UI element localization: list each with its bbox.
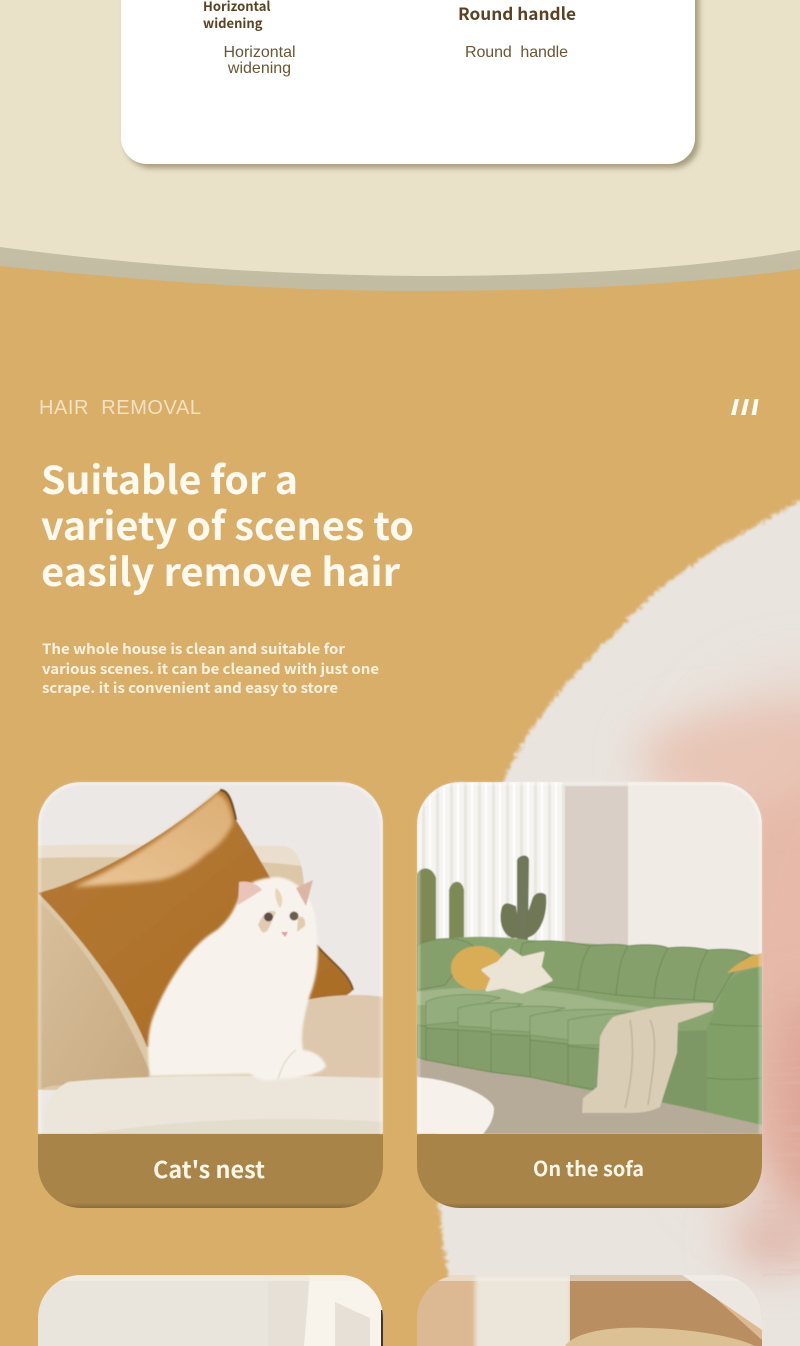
- heading: variety of scenes to: [41, 496, 414, 552]
- photo: cat on armchair: [38, 782, 383, 1134]
- section tag: hair removal: HAIR REMOVAL: [39, 397, 201, 419]
- panel: partial scene left: [38, 1275, 383, 1346]
- right arm of sofa: [660, 953, 762, 1125]
- label: round handle bold: Round handle: [458, 0, 576, 25]
- cream top section with curved edge: [0, 0, 800, 291]
- label band: cat's nest: Cat's nest: [153, 1151, 265, 1185]
- cactus plants: [417, 856, 546, 945]
- description text: The whole house is clean and suitable for: [42, 639, 346, 659]
- throw blanket: [582, 1003, 713, 1113]
- caption: horizontal widening: Horizontal: [223, 44, 296, 61]
- icon: three slanted bars: [731, 399, 758, 415]
- panel: partial scene right: [417, 1275, 762, 1346]
- panel: on the sofa: [417, 782, 762, 1208]
- label band: on the sofa: On the sofa: [533, 1153, 644, 1182]
- label band: cat's nest: [38, 1134, 383, 1208]
- photo: green sofa room: [417, 782, 762, 1134]
- caption: horizontal widening: widening: [227, 60, 291, 77]
- label: horizontal widening bold: widening: [203, 13, 263, 32]
- back cushions: [417, 939, 750, 1002]
- decorative fluffy fur backdrop: [437, 485, 800, 1346]
- caption: round handle: Round handle: [465, 44, 568, 61]
- star pillow: [483, 950, 551, 992]
- yellow round pillow: [451, 946, 505, 990]
- heading: easily remove hair: [41, 542, 400, 598]
- panel: white product card: [121, 0, 699, 168]
- panel: cat's nest: [38, 782, 383, 1208]
- description text: various scenes. it can be cleaned with just one: [42, 659, 379, 679]
- heading: Suitable for a: [41, 450, 298, 506]
- seat cushions: [417, 988, 648, 1011]
- label band: on the sofa: [417, 1134, 762, 1208]
- description text: scrape. it is convenient and easy to store: [42, 678, 338, 698]
- white round table: [417, 1077, 494, 1134]
- sofa front blocks: [417, 1025, 610, 1092]
- cat: [148, 877, 326, 1080]
